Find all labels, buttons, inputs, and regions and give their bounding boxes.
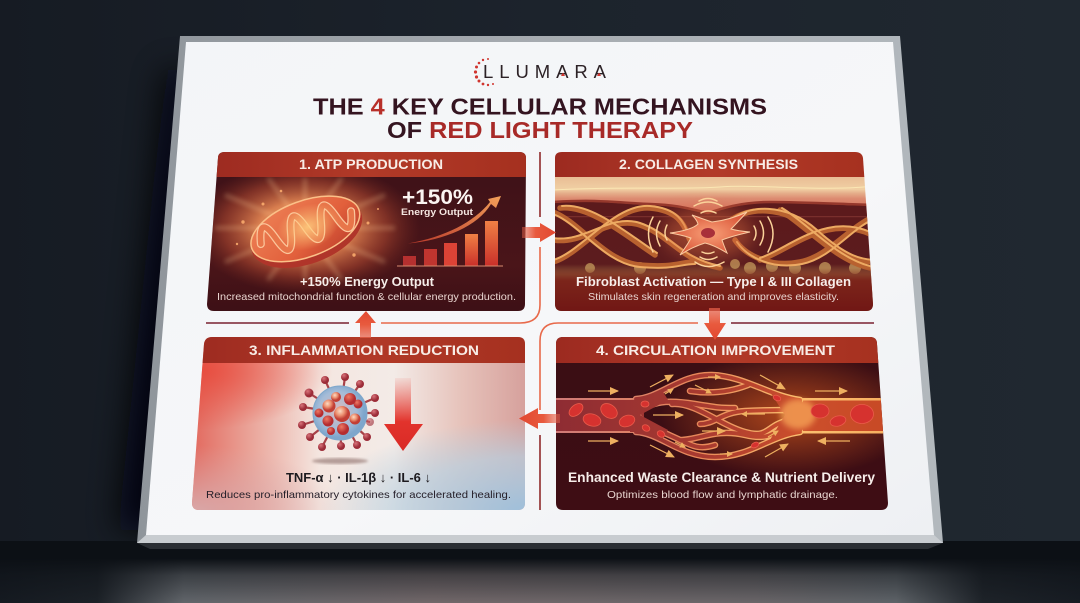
header bar (555, 152, 864, 177)
wordmark: LLUMARA (483, 61, 607, 82)
subheading: +150% Energy Output (300, 275, 435, 289)
cytokine markers: TNF-α ↓ · IL-1β ↓ · IL-6 ↓ (286, 470, 431, 485)
header bar (556, 337, 878, 363)
fat tissue (585, 259, 861, 274)
header bar (216, 152, 526, 177)
arrow: panel 1 to panel 2 (522, 223, 556, 242)
icon: cytokine virus particle (298, 373, 379, 464)
description: Optimizes blood flow and lymphatic drainage. (607, 489, 838, 501)
panel 1: ATP production (190, 150, 530, 315)
arrow: downward reduction (384, 378, 423, 451)
icon: activated fibroblast with signal waves (648, 198, 773, 266)
flow arrows (588, 375, 850, 457)
stat label: Energy Output (401, 207, 474, 218)
panel heading: 1. ATP PRODUCTION (299, 157, 443, 172)
reflective floor (0, 541, 1080, 603)
arrow: panel 4 to panel 3 (519, 408, 560, 429)
wordmark red accents (561, 72, 601, 76)
panel 4: circulation improvement (556, 337, 888, 510)
red blood cells (567, 394, 874, 449)
subheading: Enhanced Waste Clearance & Nutrient Delivery (568, 470, 875, 485)
description: Increased mitochondrial function & cellular energy production. (217, 291, 516, 303)
icon: dotted red ring (474, 58, 494, 86)
panel heading: 4. CIRCULATION IMPROVEMENT (596, 343, 836, 358)
panel 3: inflammation reduction (190, 335, 530, 512)
board front (137, 42, 943, 543)
stat: +150%: +150% (402, 186, 473, 209)
lower fade (553, 268, 878, 313)
arrow: upward trend (408, 196, 501, 244)
collagen fibres (553, 206, 878, 268)
title: OF RED LIGHT THERAPY (387, 117, 693, 143)
board frame (137, 36, 943, 543)
title (313, 94, 767, 143)
panel 2: collagen synthesis (553, 150, 878, 313)
description: Reduces pro-inflammatory cytokines for accelerated healing. (206, 489, 511, 501)
board underside (137, 543, 943, 549)
title: THE 4 KEY CELLULAR MECHANISMS (313, 94, 767, 120)
icon: glowing mitochondrion (236, 183, 379, 282)
panel heading: 3. INFLAMMATION REDUCTION (249, 343, 479, 358)
bar chart: energy output (397, 196, 503, 266)
arrow: panel 3 to panel 1 (355, 311, 376, 338)
logo: Llumara (474, 58, 607, 86)
description: Stimulates skin regeneration and improves elasticity. (588, 291, 839, 303)
subheading: Fibroblast Activation — Type I & III Collagen (576, 275, 851, 289)
arrow: panel 2 to panel 4 (704, 308, 726, 340)
board shadow (118, 70, 190, 530)
light burst behind mitochondrion (210, 177, 413, 290)
vessel junctions (630, 390, 802, 440)
header bar (202, 337, 525, 363)
panel heading: 2. COLLAGEN SYNTHESIS (619, 157, 798, 172)
blood vessels (554, 375, 890, 457)
connector lines (206, 152, 874, 510)
